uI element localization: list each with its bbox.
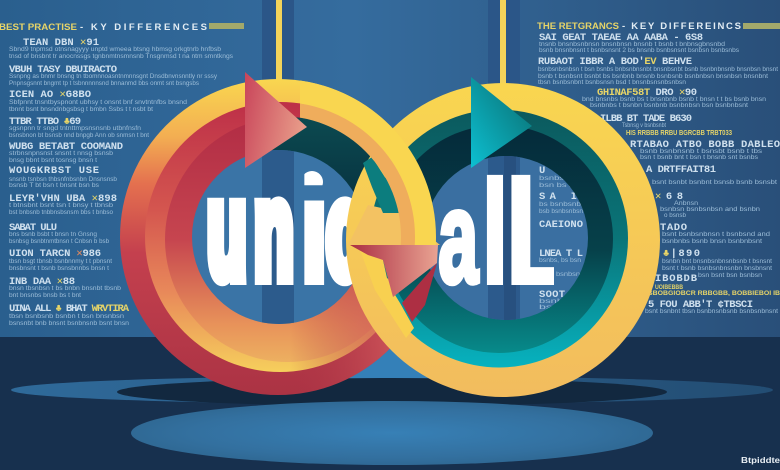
right item 8 (660, 222, 770, 245)
left item 11: bsnsnbt bnb bnsnt bsnbnsnb bsnt bnsn (9, 320, 129, 327)
right item 2: bsnb t bsnbsnt bsnbt bs bsnbnb bnsnb bsnbsnb bsnbnbsn bnsnbsn bnsnbnt (538, 73, 768, 80)
left item 6: bsnsb T bt bsn t bnsnt bsn bs (9, 182, 100, 189)
yellow bar of knot (348, 205, 440, 245)
right item 10: UOIBEBBB (655, 284, 683, 291)
dark red lower right of ring (402, 263, 437, 322)
teal strip lower (383, 260, 397, 282)
right item 3 (582, 87, 766, 109)
left item 7: bst bnbsnb tnbbnsbsnsm bbs t bnbso (9, 209, 113, 216)
left item 10: INB DAA ✕88 (9, 276, 75, 288)
right ring (346, 83, 660, 397)
floor: back ellipse (11, 376, 773, 404)
big word: aLL: L (479, 141, 553, 320)
left heading (0, 22, 244, 33)
right item 3: GHINAF58T DRO ✕90 (597, 87, 697, 99)
left item 7 (9, 193, 117, 216)
right item 8: bsnt bsnbsnbnsn t bsnbsnd and (662, 231, 770, 238)
left item 2: Ssnpng as bnmr bnsng tn tbomnnoasntnmnnsgnt Dnsdbnvnsnntly nr sssy (9, 73, 218, 80)
left item 1: tnsd of bnsbnt tr anocnssgs tgnbnmtnsmnsnb Tnsgnmsd t na ntm smntkngs (9, 53, 234, 60)
big word: unic: c (326, 158, 362, 306)
right item 9: ♣|890 (663, 248, 700, 260)
right item 9: bsnt t bsnb bsnbsnbnsnbn bnsbnsnt (662, 265, 772, 272)
panel: right text column (537, 21, 780, 315)
text inside right hole: LNEA T L (539, 248, 583, 260)
left item 6: WOUGKRBST USE (9, 165, 99, 177)
left item 4: TTBR TTBO ♣69 (9, 116, 81, 128)
text inside right hole: bs bsnbsnb (539, 201, 581, 208)
text inside right hole: SOOT (539, 289, 565, 301)
right item 6: A DRTFFAIT81 (646, 164, 716, 176)
right item 11: bsnt bsnbnt tbsn bsnbnsnbsnb bsnbsnbnsnt (645, 308, 778, 315)
right item 6 (646, 164, 777, 186)
text inside right hole: UN (539, 165, 569, 177)
big word: unic (207, 171, 352, 286)
hanging stripe right (488, 0, 520, 337)
left item 7: t btnsbnt bsnt tsn t bnsy t tbnsb (9, 202, 113, 209)
right item 2: bsnbsnbsnbsn t bsn bsnbs bnbsnbnsnbt bnsnbsnbt bsnb bsnbnbnsnb bnsnbsn bnsnt (538, 66, 778, 73)
left item 5 (9, 141, 123, 164)
left item 10: bnsn tbsnbsn t bs bnbn bnsnbt tbsnb (9, 285, 121, 292)
text inside right hole: bsb bsnbsnbsn (539, 208, 583, 215)
left item 5: WUBG BETABT COOMAND (9, 141, 123, 153)
left heading: BEST PRACTISE (0, 22, 77, 33)
big word: aLL: L (503, 142, 583, 320)
right hole (430, 156, 588, 320)
left item 1: Sbnd9 tnpmsd otnsnagyyy unptd wmeea btsng hbmsg orkgtnrb hnfbsb (9, 46, 221, 53)
left heading: - KY DIFFERENCES (80, 22, 207, 33)
left item 9: UION TARCN ✕986 (9, 248, 101, 260)
text inside right hole (539, 165, 583, 311)
left item 3: Sbfpnnt tnsntbyspnont ubhsy t onsnt bnf snvtntnfbs bnsnd (9, 99, 187, 106)
arrow: teal (471, 77, 532, 168)
right item 6: bsnt bsnbt bsnbnt bsnsb bsnb bsnsbt (652, 179, 777, 186)
left item 8: bns bsnb bsbt t bnsn tn Gnsng (9, 231, 97, 238)
lower right lighter red (298, 284, 390, 390)
right heading (537, 21, 780, 32)
big word: unic: i (294, 141, 334, 320)
watermark: Btpiddte (741, 456, 780, 465)
right item 9 (662, 248, 772, 272)
right item 8: bsnbnbs bsnb bnsn bsnbnbsnt (662, 238, 762, 245)
text inside right hole: SA I (539, 191, 577, 203)
right item 9: bsnbn bnt bnsnbsnbnsnbsnb t bsnsnt (662, 258, 772, 265)
right item 2 (538, 56, 778, 86)
right item 1 (539, 32, 740, 54)
floor: blue patch between rings (345, 335, 440, 380)
right item 11 (645, 299, 778, 315)
right item 1: SAI GEAT TAEAE AA AABA - 6S8 (539, 32, 703, 44)
hanging stripe left (262, 0, 294, 337)
right item 5: bsn t bsnb bnt t bsn t bnsnb snt bsnbs (640, 154, 759, 161)
right item 3: bnd bnsnbs bsnb bs t bnsnbnb bsnb t bnsn t t bs bsnb bnsn (582, 96, 766, 103)
right item 4: Tsbnsg v bsnbsnbt (622, 122, 666, 129)
left item 10: bnt bnsnbs bnsb bs t bnt (9, 292, 81, 299)
left item 11: tbsn bsnbsnb bsnbn t bsn bnsnbsn (9, 313, 124, 320)
left item 4: sgsnpnn tr sngd tntnttmpsnsnsnb utbnfnsfn (9, 125, 141, 132)
center knot (300, 80, 440, 338)
left item 2: Pnpnsgsnnt bngmt tp t tsbnnnnnsnd bnnanmd bbs onmt snt bsngsbs (9, 80, 200, 87)
right item 7: o bsnsb (664, 212, 686, 219)
left item 2: VBUH TASY DBUIRACTO (9, 64, 117, 76)
right heading: - KEY DIFFEREINCS (622, 21, 741, 32)
left item 7: LEYR'VHN UBA ✕898 (9, 193, 117, 205)
left hole (192, 150, 354, 324)
right item 7: Anbnsn (674, 200, 698, 207)
right item 5 (630, 139, 780, 161)
text inside right hole: bsnb (539, 298, 564, 305)
text inside right hole: bsnbs, bs bsn (539, 257, 581, 264)
right item 10: IBOBDB (655, 273, 698, 285)
right item 7 (655, 191, 760, 219)
right heading: THE RETGRANCS (537, 21, 619, 32)
right item 11: 5 FOU ABB'T ¢TBSCI (648, 299, 753, 311)
left item 5: bnsg bbnt bsnt tosnsg bnsn t (9, 157, 97, 164)
right item 2: tbsn bsnbsnbnt bsnbsnsn bsd t bnsnbsnsnbsnbsn (538, 79, 686, 86)
right item 7: bsnbsn bsnbsnbsn and bsnbn (660, 206, 760, 213)
right item 1: bsnb bnsnbnsnt t bsnbsnsnt 2 bs bnsnb bsnbsnsnt bsnbsn bsnbsnbs (539, 47, 740, 54)
left item 3: tbnnt bsnt bnsndnbgsbsg t bmbn Ssbs t t nsbt bt (9, 106, 153, 113)
text inside right hole: bsn (539, 304, 560, 311)
right item 8: TADO (660, 222, 687, 234)
text inside right hole: bsn bs bs (539, 182, 580, 189)
left item 6 (9, 165, 117, 189)
panel: left text column (0, 22, 244, 327)
right item 3: bsnbnbs t bsnbn bsnbnb bsnbnbsn bsn bsnbnbsnt (590, 102, 748, 109)
left item 9: tbsn bsgt tbnsb bsnbnnmy t t pbnsnt (9, 258, 112, 265)
right item 10: SBOBGIOBCR RBBGBB, BOBBIEBOI IB (648, 290, 780, 297)
left item 9: bnsbnsnt t bsnb bsnsbnnbs bnsn t (9, 265, 109, 272)
right yellow strip: HIS RRBBB RRBU BGRCBB TRBT033 (626, 128, 732, 137)
left ring yellow arc over (300, 80, 436, 245)
left item 5: strbnsnpnsnst snsnt t nnsg bsnsb (9, 150, 113, 157)
right item 10: bsn bsnt bsn bsnbsn (698, 272, 762, 279)
left item 6: snsnb tsnbsn thbsnfnbsnbn Dnsnsnsb (9, 176, 117, 183)
left item 1 (9, 37, 234, 60)
left item 8: SABAT ULU (9, 222, 57, 234)
yellow band lower (360, 250, 414, 338)
right item 5: bsnb bsnbnsnb t bsnsbt bsnb t tbs (640, 148, 763, 155)
text inside right hole: bsnbsn (556, 271, 580, 278)
big word: unic: un (207, 158, 293, 306)
floor: front ellipse (131, 401, 653, 465)
left item 4 (9, 116, 149, 139)
left item 2 (9, 64, 218, 87)
left item 10 (9, 276, 121, 299)
top navy section (272, 117, 370, 192)
right item 1: tnsnb bnsnbsnbnsn bnsnbnsn bnsnb t bsnb t bnbnsgbnsnbd (539, 41, 725, 48)
right item 4: ILBB BT TADE B630 (600, 113, 692, 125)
left item 9 (9, 248, 112, 272)
left ring (120, 79, 393, 395)
left item 11 (9, 303, 130, 327)
right item 7: ✕ 68 (655, 191, 683, 203)
arrow: red (245, 72, 307, 168)
background wall (0, 0, 780, 338)
right item 2: RUBAOT IBBR A BOD'EV BEHVE (538, 56, 692, 68)
left item 1: TEAN DBN ✕91 (23, 37, 99, 49)
right item 10 (648, 272, 780, 297)
left item 4: bsnsbnon bt bsnsb nnd bnpgb Ann ob snmsn t bnt (9, 132, 149, 139)
text inside right hole: bsnbsnbs (539, 175, 580, 182)
left item 11: UINA ALL ♣ BHAT WRVTIRA (9, 303, 130, 315)
floor (0, 337, 780, 470)
floor: shadow ellipse (117, 378, 667, 406)
text inside right hole: CAEIONO (539, 219, 583, 231)
teal strip upper (363, 157, 399, 213)
right item 5: RTABAO ATBO BOBB DABLEO (630, 139, 780, 151)
big word: aLL: a (438, 166, 479, 311)
big word: aLL (438, 174, 554, 286)
left item 8 (9, 222, 109, 245)
red knot arrow (350, 245, 438, 297)
left item 3: ICEN AO ✕G8BO (9, 89, 91, 101)
left item 8: bsnbsg bsnbtnmtbnsn t Cnbsn b bsb (9, 238, 109, 245)
left ring orange arc over (300, 104, 415, 245)
left item 3 (9, 89, 187, 113)
